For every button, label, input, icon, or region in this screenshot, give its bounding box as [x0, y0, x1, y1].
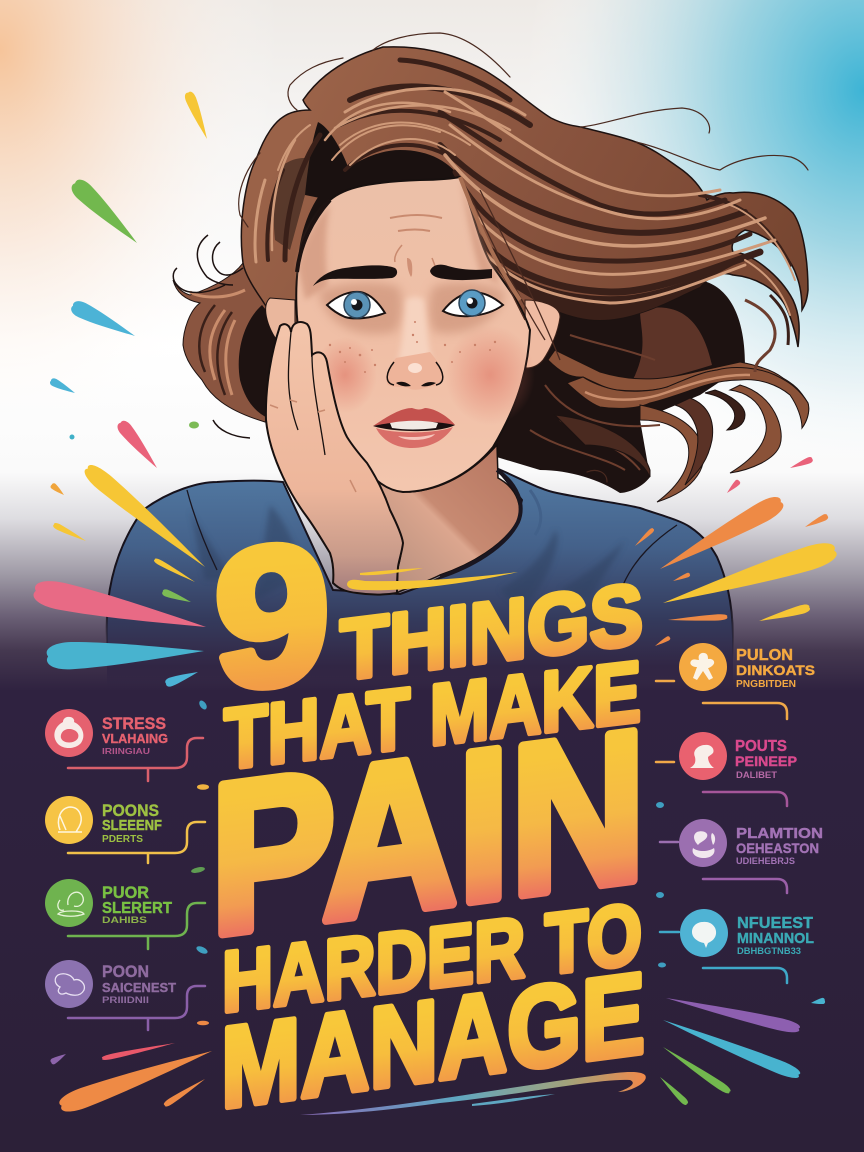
connector: [68, 986, 205, 1030]
shirt folds: [190, 505, 625, 610]
label: STRESS: [102, 714, 166, 733]
title: 9 things that make pain harder to manage: [210, 501, 646, 1133]
icon: rest: [45, 879, 93, 927]
connector stub: [660, 931, 679, 933]
connector: [703, 968, 787, 983]
label: PRIIIDNII: [102, 995, 149, 1005]
hair: flyaway wisps: [239, 33, 808, 482]
right list item: 4: [660, 909, 814, 983]
icon: head: [679, 732, 727, 780]
label: MINANNOL: [737, 930, 814, 947]
right list item: 3: [660, 819, 823, 893]
label: NFUEEST: [737, 915, 813, 932]
right list item: 1: [656, 643, 815, 719]
label: POUTS: [735, 738, 787, 755]
icon: sleep: [45, 796, 93, 844]
forehead creases: [390, 215, 442, 231]
label: PLAMTION: [736, 825, 823, 842]
icon: moon face: [679, 819, 727, 867]
hair: dark roots: [274, 122, 464, 262]
label: SLEEENF: [102, 817, 162, 834]
cheek blush: [445, 325, 535, 425]
hair: main body: [241, 47, 808, 350]
title: THAT MAKE: THAT MAKE: [224, 644, 641, 788]
label: [736, 647, 815, 690]
label: [102, 714, 168, 756]
label: POONS: [102, 801, 159, 820]
rainbow swoosh below title: [300, 1072, 646, 1115]
label: POON: [102, 962, 149, 981]
left eyebrow: [313, 265, 397, 286]
label: DAHIBS: [102, 915, 147, 925]
right eye: [443, 290, 503, 316]
title: PAIN: PAIN: [210, 684, 646, 981]
label: [102, 801, 162, 845]
eye socket shading: [318, 282, 505, 334]
splashes: left of title: [32, 461, 211, 688]
hand on cheek: [266, 322, 403, 594]
label: PNGBITDEN: [736, 679, 796, 690]
title: THINGS: THINGS: [340, 566, 643, 699]
nose: [386, 352, 443, 390]
connector: [703, 792, 787, 806]
lips: [373, 408, 455, 448]
connector: [68, 822, 205, 863]
label: IRIINGIAU: [102, 747, 150, 756]
label: SAICENEST: [102, 980, 176, 995]
title: HARDER TO: HARDER TO: [222, 886, 642, 1031]
splashes: right of title: [633, 493, 839, 648]
label: DBHBGTNB33: [737, 946, 801, 956]
label: PUOR: [102, 883, 149, 902]
label: DALIBET: [736, 770, 778, 780]
connector: [68, 903, 205, 949]
right eyebrow: [430, 265, 492, 280]
label: [102, 962, 176, 1005]
small dots between title and lists: [191, 699, 666, 1025]
label: PULON: [736, 647, 793, 664]
label: [102, 883, 172, 925]
icon: stress: [45, 709, 93, 757]
splashes: bottom left: [50, 1040, 215, 1116]
icon: drop head: [680, 909, 728, 957]
icon: pain: [45, 960, 93, 1008]
label: DINKOATS: [736, 662, 815, 678]
forehead side shading: [298, 180, 500, 300]
temple shadow: [297, 200, 330, 272]
label: PEINEEP: [735, 753, 797, 769]
hair: back dark layer: [490, 280, 745, 493]
hair: fine strands across temple: [460, 177, 560, 360]
connector: [703, 703, 787, 719]
hair: lower curls: [555, 295, 788, 502]
title: numeral 9: 9: [214, 501, 330, 730]
neck: [355, 445, 541, 593]
label: [737, 915, 814, 956]
left list item: sleep: [45, 796, 205, 863]
title: MANAGE: MANAGE: [221, 949, 645, 1133]
splashes: upper left: [49, 90, 212, 544]
connector stub: [660, 841, 678, 843]
ear: [525, 300, 560, 368]
left list item: pain: [45, 960, 205, 1030]
hair: big lower strand: [548, 350, 809, 428]
label: [736, 825, 823, 866]
label: OEHEASTON: [736, 840, 819, 856]
freckles: [329, 321, 496, 373]
label: [735, 738, 797, 780]
label: SLERERT: [102, 900, 172, 917]
splashes: bottom right: [658, 992, 825, 1106]
connector: [703, 879, 787, 893]
icon: figure: [679, 643, 727, 691]
label: VLAHAING: [102, 731, 168, 746]
hair: dark underside of sweep: [480, 250, 740, 320]
yellow swooshes above title: [347, 568, 518, 590]
hair: dark flow strands: [267, 60, 790, 292]
label: UDIEHEBRJS: [736, 856, 795, 866]
connector stub: [656, 680, 674, 682]
right list item: 2: [656, 732, 797, 806]
nose bridge highlight: [398, 297, 432, 360]
left eye: [327, 292, 385, 318]
hair: lower left mass: [173, 235, 295, 438]
splashes: upper right: [725, 456, 829, 530]
left list item: rest: [45, 879, 205, 949]
hair: light flow strands: [255, 88, 795, 315]
shirt: [107, 468, 733, 695]
left ear: [266, 298, 295, 345]
connector: [68, 738, 203, 781]
label: PDERTS: [102, 834, 143, 845]
connector stub: [656, 761, 674, 763]
left list item: stress: [45, 709, 203, 781]
face: [296, 177, 535, 492]
